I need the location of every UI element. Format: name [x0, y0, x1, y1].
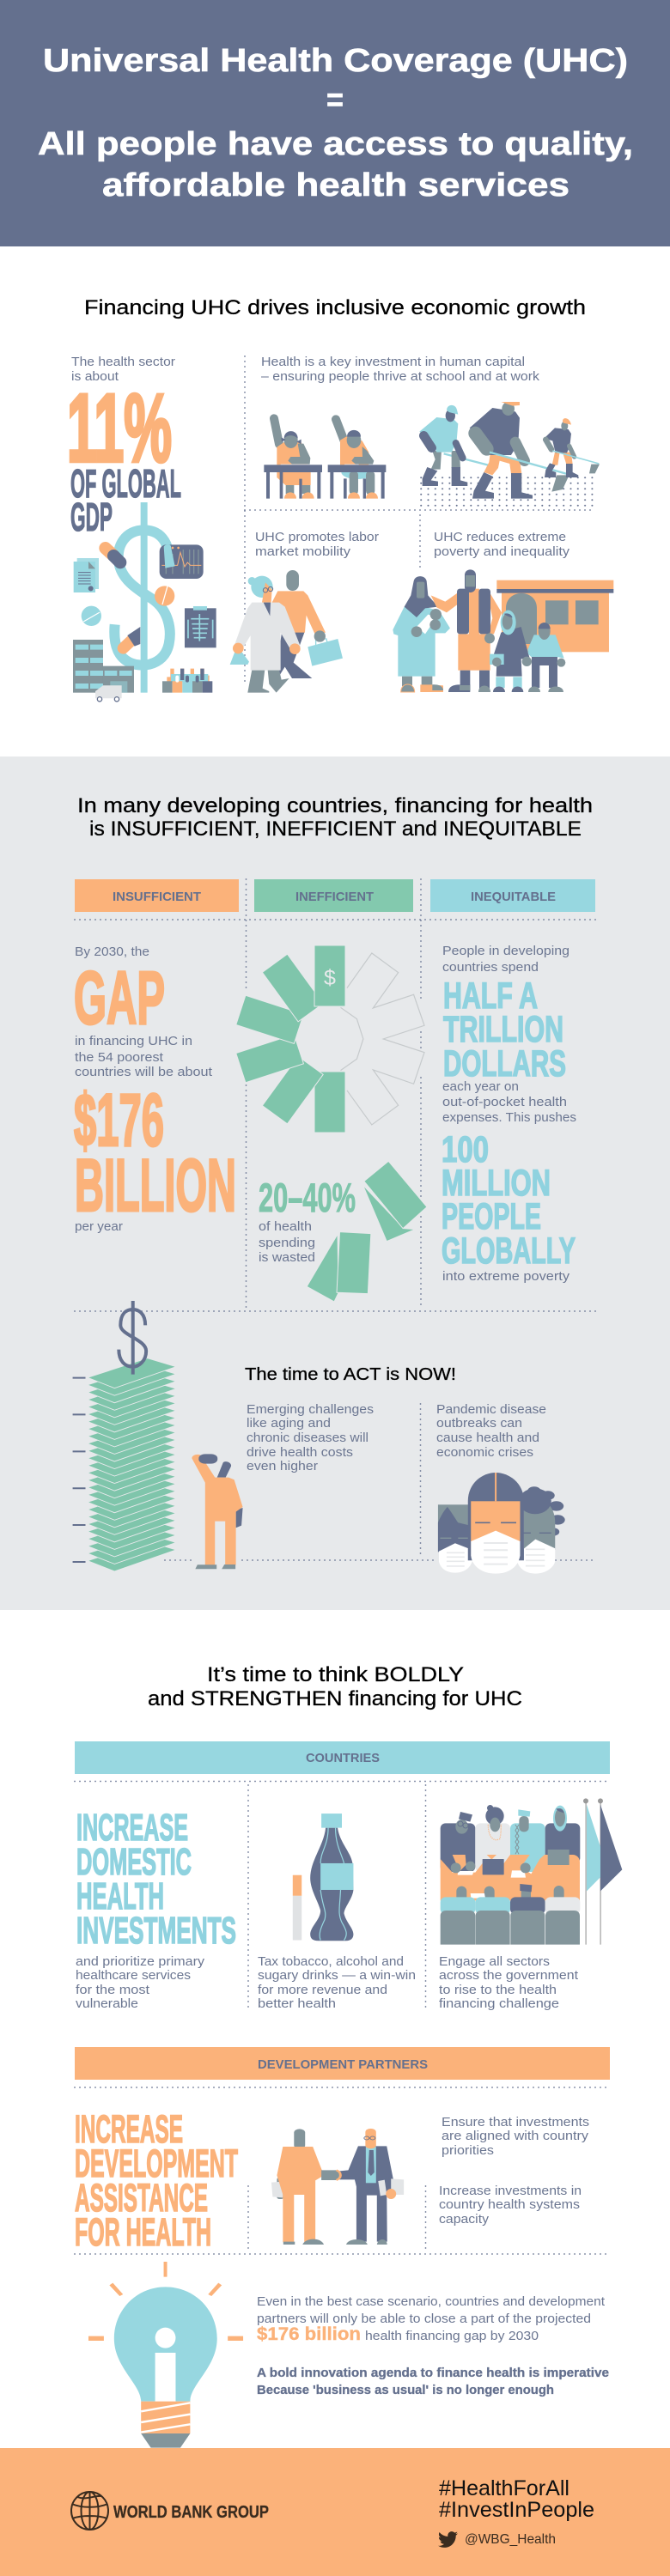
column: inequitable text: [442, 945, 576, 1284]
text block: aligned investments: [442, 2116, 589, 2158]
banner: development partners: DEVELOPMENT PARTNERS: [258, 2057, 428, 2072]
text block: aligned investments: are aligned with country: [442, 2129, 589, 2143]
text block: pandemic: [436, 1403, 546, 1460]
text block: emerging challenges: [247, 1403, 374, 1473]
figure: boy: [527, 623, 565, 692]
headline: development assistance: FOR HEALTH: [75, 2210, 211, 2254]
chart: wheel of bills, 40 percent wasted: [236, 945, 424, 1133]
figure: person looking up: [192, 1454, 243, 1569]
text block: systems capacity: capacity: [439, 2213, 490, 2227]
icon: orange tablet: [155, 586, 174, 606]
text block: systems capacity: [439, 2184, 582, 2227]
column: inequitable text: PEOPLE: [442, 1196, 541, 1237]
hashtags: #InvestInPeople: [439, 2498, 594, 2522]
banner: countries: [75, 1741, 610, 1774]
text block: emerging challenges: chronic diseases will: [247, 1431, 368, 1445]
icon: dollar on bill: $: [324, 966, 336, 990]
stat: 11 percent of global GDP: 11%: [67, 374, 172, 482]
column: insufficient text: BILLION: [75, 1145, 236, 1227]
panel: header: [0, 0, 670, 246]
text block: engage sectors: across the government: [439, 1969, 578, 1983]
callout: best case scenario: [257, 2295, 609, 2397]
column: insufficient text: [74, 945, 236, 1234]
headline: development assistance: [75, 2107, 238, 2254]
column: domestic investments: INCREASE: [76, 1807, 188, 1849]
column: domestic investments: vulnerable: [76, 1997, 138, 2011]
callout: best case scenario: health financing gap by 2030: [365, 2330, 539, 2343]
column: insufficient text: $176: [74, 1079, 164, 1162]
column: inequitable text: each year on: [442, 1080, 519, 1094]
text block: health sector: The health sector: [71, 355, 175, 369]
icon: monitor: [160, 544, 204, 579]
column: inequitable text: MILLION: [442, 1163, 551, 1204]
text block: systems capacity: country health systems: [439, 2198, 580, 2212]
text block: pandemic: economic crises: [436, 1446, 533, 1460]
text block: tax: sugary drinks — a win-win: [258, 1969, 416, 1983]
text block: pandemic: outbreaks can: [436, 1417, 522, 1431]
text block: emerging challenges: drive health costs: [247, 1446, 353, 1460]
figure: girl: [490, 611, 532, 692]
heading: think boldly: [148, 1663, 522, 1710]
icon: light bulb: [88, 2262, 243, 2448]
text block: pandemic: cause health and: [436, 1431, 539, 1445]
column: inequitable text: countries spend: [442, 961, 539, 975]
column header: inequitable: INEQUITABLE: [471, 890, 556, 904]
illustration: students at desks: [264, 418, 386, 499]
column header: insufficient: INSUFFICIENT: [113, 890, 201, 904]
illustration: doctor and worker walking: [230, 570, 343, 693]
callout: best case scenario: Because 'business as usual' is no longer enough: [257, 2384, 554, 2397]
twitter handle: @WBG_Health: [465, 2532, 556, 2547]
text block: labor mobility: [255, 531, 379, 559]
column: domestic investments: and prioritize primary: [76, 1955, 205, 1969]
icon: capsule bottom: [123, 627, 140, 648]
banner: development partners: [75, 2047, 610, 2080]
column: domestic investments: [76, 1807, 236, 2011]
text block: emerging challenges: Emerging challenges: [247, 1403, 374, 1417]
column: inequitable text: DOLLARS: [443, 1043, 566, 1084]
column header: inefficient: [254, 879, 413, 912]
title line 2: All people have access to quality,: [38, 126, 633, 162]
illustration: government meeting and flags: [441, 1798, 622, 1945]
illustration: dollar sign with health icons: [73, 502, 216, 702]
column: inequitable text: TRILLION: [443, 1009, 563, 1050]
column: insufficient text: GAP: [74, 957, 165, 1040]
callout: best case scenario: partners will only be able to close a part of the projected: [257, 2312, 591, 2326]
hashtags: [439, 2476, 594, 2522]
heading: time to act: The time to ACT is NOW!: [245, 1365, 456, 1384]
column: inequitable text: 100: [442, 1129, 489, 1170]
panel: developing countries background: [0, 756, 670, 1610]
column: domestic investments: HEALTH: [76, 1875, 164, 1917]
hashtags: #HealthForAll: [439, 2476, 570, 2500]
stat: 11 percent of global GDP: [67, 374, 181, 539]
text block: poverty: [434, 531, 570, 559]
text block: poverty: UHC reduces extreme: [434, 531, 566, 544]
icon: blue tablet: [82, 606, 101, 626]
column: inequitable text: GLOBALLY: [442, 1230, 576, 1272]
equals sign: =: [326, 82, 344, 118]
icon: capsule top: [106, 548, 120, 562]
column: inefficient text: 20–40%: [259, 1175, 356, 1220]
icon: ambulance: [95, 685, 122, 702]
heading: insufficient inefficient inequitable: In many developing countries, financing for health: [77, 794, 593, 817]
illustration: family and house: [393, 569, 613, 692]
icon: flags: [583, 1798, 622, 1945]
column: inequitable text: expenses. This pushes: [442, 1111, 576, 1125]
heading: insufficient inefficient inequitable: is INSUFFICIENT, INEFFICIENT and INEQUITABLE: [89, 817, 582, 841]
callout: best case scenario: Even in the best case scenario, countries and development: [257, 2295, 605, 2309]
stat: 11 percent of global GDP: GDP: [70, 495, 113, 539]
title line 1: Universal Health Coverage (UHC): [43, 43, 628, 79]
banner: countries: COUNTRIES: [306, 1751, 380, 1765]
text block: emerging challenges: even higher: [247, 1460, 318, 1473]
column: inefficient text: is wasted: [259, 1251, 315, 1265]
heading: insufficient inefficient inequitable: [77, 794, 593, 841]
icon: twitter bird: [438, 2531, 458, 2548]
text block: tax: better health: [258, 1997, 336, 2011]
text block: engage sectors: [439, 1955, 578, 2011]
column: inequitable text: HALF A: [443, 975, 538, 1017]
illustration: people in masks: [438, 1473, 565, 1574]
column: insufficient text: By 2030, the: [75, 945, 149, 959]
text block: emerging challenges: like aging and: [247, 1417, 331, 1431]
text: OF GLOBAL: [70, 461, 181, 506]
column: insufficient text: countries will be about: [75, 1066, 212, 1079]
column: insufficient text: in financing UHC in: [75, 1035, 192, 1048]
column: inequitable text: out-of-pocket health: [442, 1096, 567, 1109]
column: inefficient text: of health: [259, 1220, 312, 1234]
column: domestic investments: for the most: [76, 1984, 149, 1997]
text block: human capital: – ensuring people thrive at school and at work: [261, 370, 540, 384]
text block: health sector: [71, 355, 175, 384]
heading: financing UHC: Financing UHC drives inclusive economic growth: [84, 296, 586, 319]
column header: inequitable: [430, 879, 595, 912]
text block: aligned investments: Ensure that investments: [442, 2116, 589, 2129]
text block: pandemic: Pandemic disease: [436, 1403, 546, 1417]
text block: human capital: Health is a key investment in human capital: [261, 355, 525, 369]
column: domestic investments: DOMESTIC: [76, 1841, 192, 1883]
text block: poverty: poverty and inequality: [434, 545, 570, 559]
text block: tax: Tax tobacco, alcohol and: [258, 1955, 404, 1969]
heading: think boldly: and STRENGTHEN financing for UHC: [148, 1687, 522, 1710]
icon: falling bills: [307, 1161, 427, 1302]
text block: engage sectors: financing challenge: [439, 1997, 559, 2011]
text block: engage sectors: to rise to the health: [439, 1984, 557, 1997]
callout: best case scenario: A bold innovation agenda to finance health is imperative: [257, 2366, 609, 2380]
illustration: handshake: [271, 2129, 404, 2245]
column: domestic investments: healthcare services: [76, 1969, 191, 1983]
text block: aligned investments: priorities: [442, 2144, 494, 2158]
illustration: workers with hoes: [419, 402, 600, 499]
column: domestic investments: INVESTMENTS: [76, 1910, 236, 1952]
column: inequitable text: into extreme poverty: [442, 1270, 570, 1284]
heading: think boldly: It’s time to think BOLDLY: [207, 1663, 464, 1686]
column: inefficient text: spending: [259, 1236, 315, 1250]
chart: rising stack of money: [73, 1301, 176, 1571]
column: inequitable text: People in developing: [442, 945, 570, 958]
icon: crowd of people: [162, 669, 212, 693]
panel: footer: [0, 2448, 670, 2576]
column header: insufficient: [75, 879, 239, 912]
title line 3: affordable health services: [102, 167, 570, 204]
icon: bottle and cigarette: [293, 1814, 353, 1941]
figure: man: [431, 569, 502, 692]
callout: best case scenario: $176 billion: [257, 2324, 361, 2344]
icon: x-ray clipboard: [185, 606, 216, 647]
text block: labor mobility: UHC promotes labor: [255, 531, 379, 544]
column header: inefficient: INEFFICIENT: [295, 890, 374, 904]
column: inefficient text: [259, 1175, 356, 1265]
headline: development assistance: DEVELOPMENT: [75, 2142, 238, 2185]
text block: human capital: [261, 355, 540, 384]
logo: World Bank Group: [71, 2492, 269, 2530]
figure: woman with baby: [393, 576, 450, 692]
headline: development assistance: INCREASE: [75, 2107, 183, 2151]
headline: development assistance: ASSISTANCE: [75, 2176, 208, 2220]
icon: hospital building: [73, 640, 134, 693]
column: insufficient text: per year: [75, 1220, 123, 1234]
icon: dollar on stack: [119, 1301, 146, 1375]
icon: document: [74, 558, 99, 592]
text block: tax: [258, 1955, 416, 2011]
column: insufficient text: the 54 poorest: [75, 1051, 163, 1065]
logo: World Bank Group: WORLD BANK GROUP: [113, 2503, 269, 2522]
text block: engage sectors: Engage all sectors: [439, 1955, 550, 1969]
text block: labor mobility: market mobility: [255, 545, 351, 559]
text block: tax: for more revenue and: [258, 1984, 387, 1997]
text block: systems capacity: Increase investments in: [439, 2184, 582, 2198]
text block: health sector: is about: [71, 370, 119, 384]
